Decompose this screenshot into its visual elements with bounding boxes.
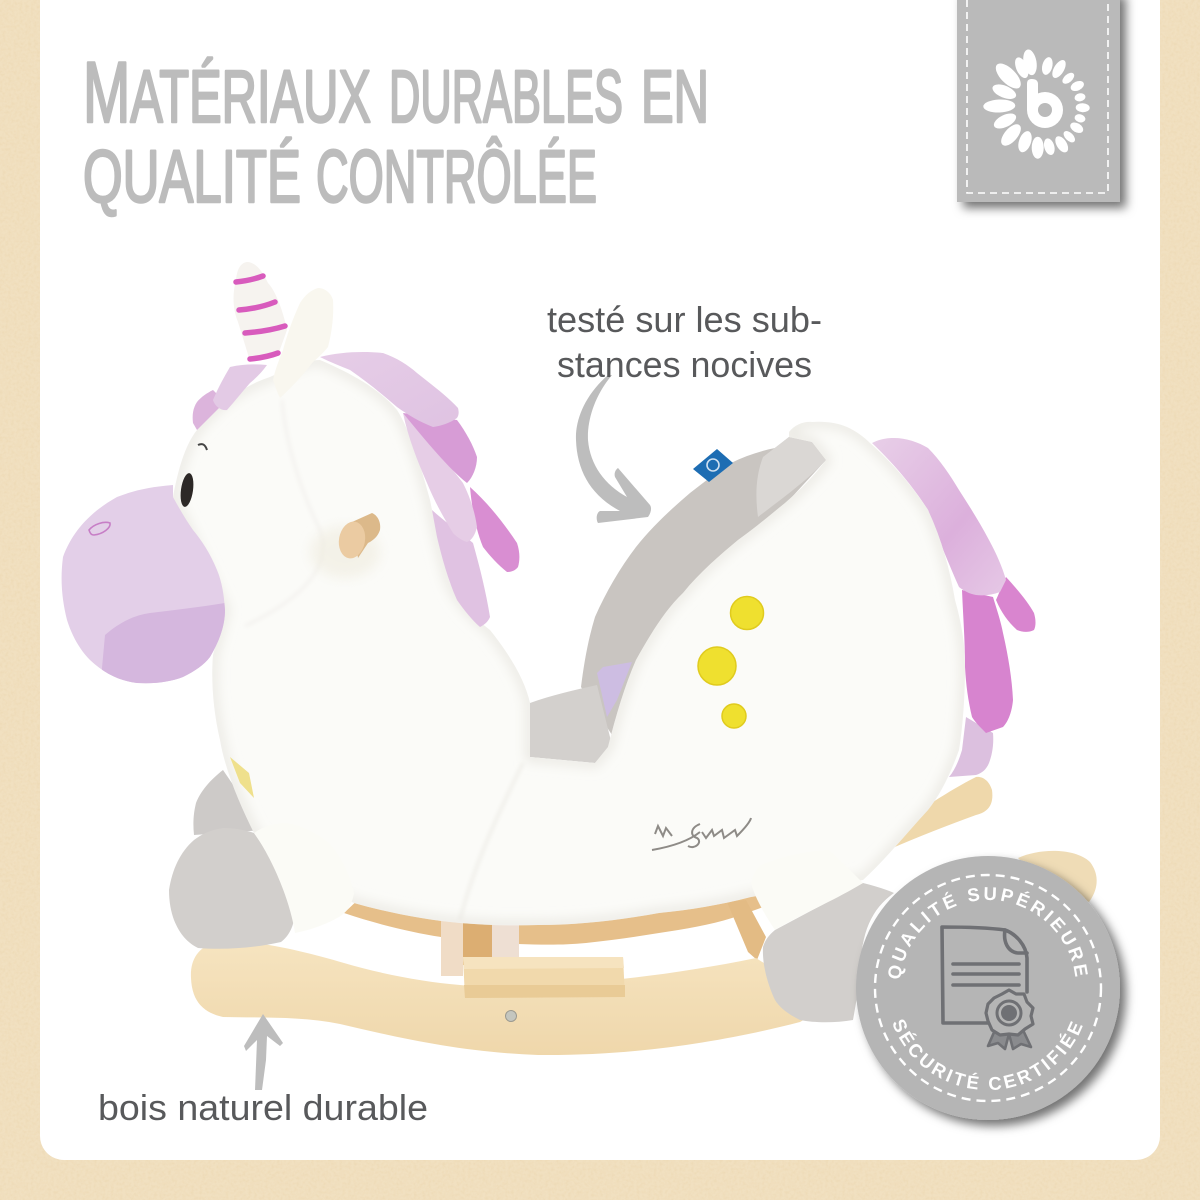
seat base (530, 685, 612, 763)
illustration: rocking unicorn (62, 262, 1097, 1055)
strap (597, 662, 632, 717)
title line 1: Matériaux durables en: DURABLES (389, 55, 623, 138)
mane (193, 352, 519, 627)
eyebrow (198, 444, 207, 450)
badge top text: QUALITÉ SUPÉRIEURE (888, 887, 1088, 978)
icon: certificate (942, 927, 1033, 1049)
muzzle (62, 485, 235, 690)
star (230, 757, 254, 798)
logo tag (957, 0, 1120, 202)
tag stitching (967, 0, 1108, 193)
signature (652, 818, 751, 850)
stand posts (441, 900, 766, 976)
mane top lock (320, 352, 459, 427)
mane strand: deep pink (470, 487, 519, 572)
title line 2: qualité contrôlée: CONTRÔLÉE (316, 135, 597, 218)
rear foot (763, 883, 894, 1022)
badge stitched ring (875, 875, 1101, 1101)
arrow: to seat (576, 375, 651, 523)
label: natural wood: bois naturel durable (98, 1087, 428, 1128)
blue label (693, 449, 733, 482)
wooden peg (310, 513, 380, 578)
ear (273, 288, 333, 398)
seat inner highlight (756, 437, 826, 517)
front foot (169, 828, 295, 949)
rear rocker under body (344, 820, 870, 945)
title line 2: qualité contrôlée: QUALITÉ (83, 135, 301, 218)
tail (872, 438, 1036, 777)
front rocker (191, 941, 830, 1055)
eye (179, 472, 195, 508)
rear rocker end (848, 777, 992, 868)
tag background (957, 0, 1120, 202)
label: harmful substances: testé sur les sub- (547, 299, 822, 340)
far rocker tip (1018, 851, 1097, 902)
mane strand: dark (403, 413, 477, 483)
footrest (463, 957, 625, 998)
mane left lock (213, 364, 267, 410)
front leg (254, 823, 354, 933)
title line 2: qualité contrôlée (83, 135, 597, 218)
body (173, 360, 965, 925)
badge bottom text: SÉCURITÉ CERTIFIÉE (893, 1020, 1083, 1090)
label: harmful substances (547, 299, 822, 385)
title line 1: Matériaux durables en (83, 45, 709, 141)
yellow spots (698, 596, 764, 728)
title (83, 45, 709, 218)
icon: flower logo (983, 48, 1090, 159)
mane strand: lower (432, 510, 490, 627)
arrow: to wood (244, 1014, 283, 1090)
mane strand: middle light (403, 413, 477, 542)
badge disc (856, 856, 1120, 1120)
seat back (581, 437, 826, 735)
mane left dark (193, 390, 225, 430)
rear leg (751, 850, 863, 930)
badge: certified quality (855, 854, 1134, 1134)
screw (506, 1010, 516, 1022)
far leg (193, 770, 264, 835)
horn (234, 262, 287, 361)
title line 1: Matériaux durables en: MATÉRIAUX (83, 45, 371, 141)
label: harmful substances: stances nocives (557, 344, 812, 385)
title line 1: Matériaux durables en: EN (641, 55, 709, 138)
